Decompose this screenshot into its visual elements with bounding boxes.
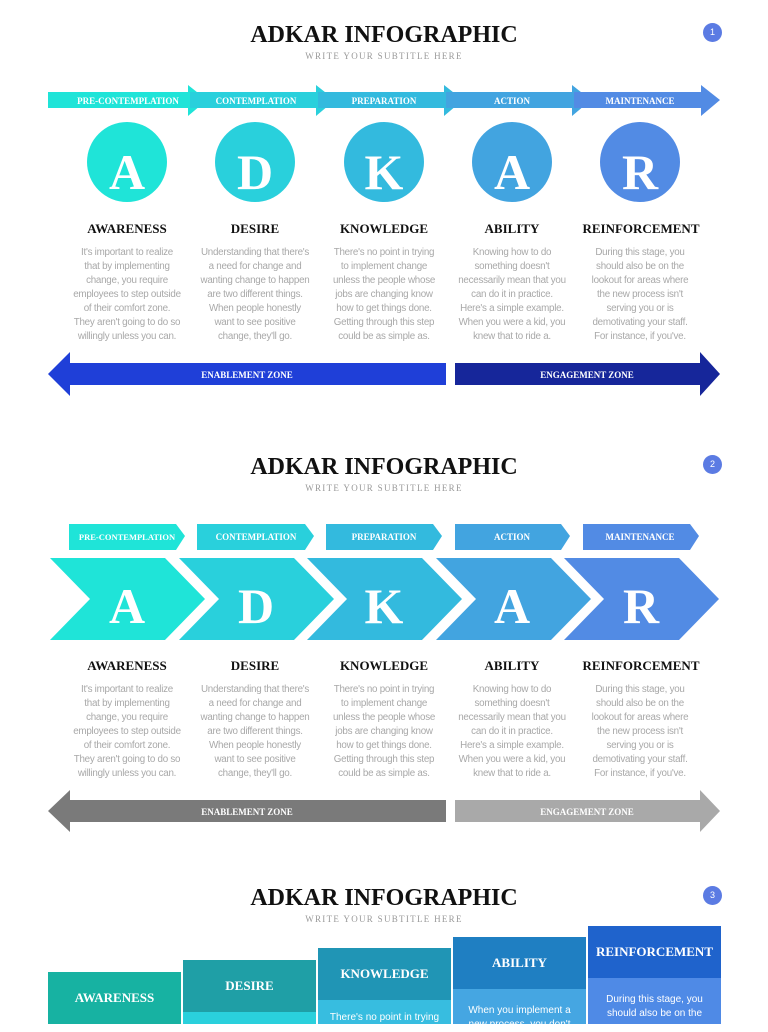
box desire: DESIRE — [225, 978, 274, 993]
zone arrows 2: ENGAGEMENT ZONE — [540, 807, 634, 817]
columns 2: Here's a simple example. — [460, 740, 564, 751]
columns 2: should also be on the — [596, 698, 684, 709]
columns 1: Getting through this step — [334, 317, 434, 328]
columns 1: jobs are changing know — [335, 289, 433, 300]
tags — [69, 524, 699, 550]
zone arrows 1 — [48, 352, 720, 396]
stage arrow row: PREPARATION — [352, 96, 417, 106]
columns 2: During this stage, you — [595, 684, 685, 695]
columns 1: can do it in practice. — [471, 289, 553, 300]
chevrons 2 — [48, 524, 720, 832]
zone arrows 1: ENGAGEMENT ZONE — [540, 370, 634, 380]
columns 1: the new process isn't — [597, 289, 683, 300]
columns 1: REINFORCEMENT — [582, 221, 700, 236]
letter circles: A — [109, 144, 145, 200]
columns 1: of their comfort zone. — [84, 303, 170, 314]
zone arrows 2 — [48, 790, 720, 832]
columns 2: could be as simple as. — [338, 768, 430, 779]
columns 2: something doesn't — [475, 698, 549, 709]
stage arrow row — [48, 85, 720, 116]
columns 2: that by implementing — [84, 698, 170, 709]
tags: CONTEMPLATION — [216, 532, 297, 542]
columns 2: are two different things. — [207, 726, 303, 737]
columns 2: lookout for areas where — [592, 712, 688, 723]
columns 1: knew that to ride a. — [473, 331, 551, 342]
tags: PREPARATION — [352, 532, 417, 542]
big chevrons: A — [494, 578, 530, 634]
columns 2: AWARENESS — [87, 658, 167, 673]
columns 2: employees to step outside — [73, 726, 181, 737]
tags: PRE-CONTEMPLATION — [79, 532, 176, 542]
columns 1: For instance, if you've. — [594, 331, 686, 342]
columns 2: DESIRE — [231, 658, 279, 673]
letter circles: K — [365, 144, 404, 200]
big chevrons: A — [109, 578, 145, 634]
columns 2: It's important to realize — [81, 684, 173, 695]
title 2: ADKAR INFOGRAPHIC — [250, 454, 518, 480]
columns 2: When you were a kid, you — [459, 754, 565, 765]
columns 1: necessarily mean that you — [458, 275, 566, 286]
box ability: ABILITY — [492, 955, 547, 970]
box awareness — [48, 972, 181, 1024]
box awareness: AWARENESS — [75, 990, 154, 1005]
zone arrows 1: ENABLEMENT ZONE — [201, 370, 293, 380]
columns 1: should also be on the — [596, 261, 684, 272]
columns 2: Getting through this step — [334, 754, 434, 765]
big chevrons: D — [238, 578, 274, 634]
stage arrow row: CONTEMPLATION — [216, 96, 297, 106]
columns 1: They aren't going to do so — [74, 317, 180, 328]
columns 1: wanting change to happen — [201, 275, 309, 286]
columns 2: demotivating your staff. — [592, 754, 688, 765]
columns 1: ABILITY — [485, 221, 539, 236]
columns 1: Understanding that there's — [201, 247, 309, 258]
tags: ACTION — [494, 532, 530, 542]
columns 1: how to get things done. — [336, 303, 432, 314]
subtitle 1: WRITE YOUR SUBTITLE HERE — [305, 51, 463, 61]
stage arrows and circles 1 — [48, 85, 720, 396]
columns 2: how to get things done. — [336, 740, 432, 751]
box knowledge: There's no point in trying — [330, 1012, 439, 1023]
box reinforcement — [588, 926, 721, 1024]
letter circles — [87, 122, 680, 202]
columns 2: jobs are changing know — [335, 726, 433, 737]
columns 1: AWARENESS — [87, 221, 167, 236]
columns 1: unless the people whose — [333, 275, 435, 286]
columns 2: serving you or is — [606, 740, 674, 751]
badge 3 — [703, 886, 722, 905]
box knowledge: KNOWLEDGE — [340, 966, 429, 981]
staircase boxes — [48, 926, 721, 1030]
columns 1 — [73, 221, 700, 342]
columns 1: are two different things. — [207, 289, 303, 300]
big chevrons — [50, 558, 719, 640]
columns 2: of their comfort zone. — [84, 740, 170, 751]
subtitle 3: WRITE YOUR SUBTITLE HERE — [305, 914, 463, 924]
columns 2: KNOWLEDGE — [340, 658, 428, 673]
zone arrows 2: ENABLEMENT ZONE — [201, 807, 293, 817]
columns 1: DESIRE — [231, 221, 279, 236]
columns 1: When people honestly — [209, 303, 301, 314]
letter circles: A — [494, 144, 530, 200]
columns 1: employees to step outside — [73, 289, 181, 300]
columns 2: a need for change and — [209, 698, 301, 709]
columns 2: willingly unless you can. — [78, 768, 176, 779]
columns 2: change, you require — [86, 712, 168, 723]
letter circles: R — [622, 144, 659, 200]
columns 1: serving you or is — [606, 303, 674, 314]
box desire — [183, 960, 316, 1024]
columns 2: change, they'll go. — [218, 768, 292, 779]
columns 2: knew that to ride a. — [473, 768, 551, 779]
big chevrons: K — [365, 578, 404, 634]
columns 2: necessarily mean that you — [458, 712, 566, 723]
columns 1: could be as simple as. — [338, 331, 430, 342]
columns 1: KNOWLEDGE — [340, 221, 428, 236]
columns 2: unless the people whose — [333, 712, 435, 723]
columns 2: Knowing how to do — [473, 684, 551, 695]
columns 2: When people honestly — [209, 740, 301, 751]
columns 1: that by implementing — [84, 261, 170, 272]
columns 1: something doesn't — [475, 261, 549, 272]
stage arrow row: ACTION — [494, 96, 530, 106]
columns 2: Understanding that there's — [201, 684, 309, 695]
title 1: ADKAR INFOGRAPHIC — [250, 22, 518, 48]
columns 1: Here's a simple example. — [460, 303, 564, 314]
box reinforcement: should also be on the — [607, 1008, 702, 1019]
columns 1: change, they'll go. — [218, 331, 292, 342]
badge 3: 3 — [710, 890, 715, 900]
columns 2: For instance, if you've. — [594, 768, 686, 779]
badge 2: 2 — [710, 459, 715, 469]
text: new process, you don't — [469, 1019, 570, 1030]
columns 1: willingly unless you can. — [78, 331, 176, 342]
stage arrow row: MAINTENANCE — [605, 96, 675, 106]
columns 2: REINFORCEMENT — [582, 658, 700, 673]
columns 2: the new process isn't — [597, 726, 683, 737]
box ability — [453, 937, 586, 1024]
columns 2: ABILITY — [485, 658, 539, 673]
title 3: ADKAR INFOGRAPHIC — [250, 885, 518, 911]
columns 1: demotivating your staff. — [592, 317, 688, 328]
columns 2: They aren't going to do so — [74, 754, 180, 765]
columns 1: Knowing how to do — [473, 247, 551, 258]
tags: MAINTENANCE — [605, 532, 675, 542]
letter circles: D — [237, 144, 273, 200]
badge 2 — [703, 455, 722, 474]
columns 1: change, you require — [86, 275, 168, 286]
columns 2: want to see positive — [214, 754, 296, 765]
columns 2: can do it in practice. — [471, 726, 553, 737]
columns 2: There's no point in trying — [334, 684, 434, 695]
box reinforcement: REINFORCEMENT — [596, 944, 713, 959]
columns 1: to implement change — [341, 261, 427, 272]
columns 1: There's no point in trying — [334, 247, 434, 258]
stage arrow row: PRE-CONTEMPLATION — [77, 96, 179, 106]
columns 1: a need for change and — [209, 261, 301, 272]
columns 1: During this stage, you — [595, 247, 685, 258]
columns 1: lookout for areas where — [592, 275, 688, 286]
columns 2: to implement change — [341, 698, 427, 709]
subtitle 2: WRITE YOUR SUBTITLE HERE — [305, 483, 463, 493]
box reinforcement: During this stage, you — [606, 994, 703, 1005]
columns 1: It's important to realize — [81, 247, 173, 258]
box ability: When you implement a — [468, 1005, 571, 1016]
columns 1: When you were a kid, you — [459, 317, 565, 328]
columns 2: wanting change to happen — [201, 712, 309, 723]
badge 1: 1 — [710, 27, 715, 37]
columns 1: want to see positive — [214, 317, 296, 328]
big chevrons: R — [623, 578, 660, 634]
box knowledge — [318, 948, 451, 1024]
columns 2 — [73, 658, 700, 779]
badge 1 — [703, 23, 722, 42]
